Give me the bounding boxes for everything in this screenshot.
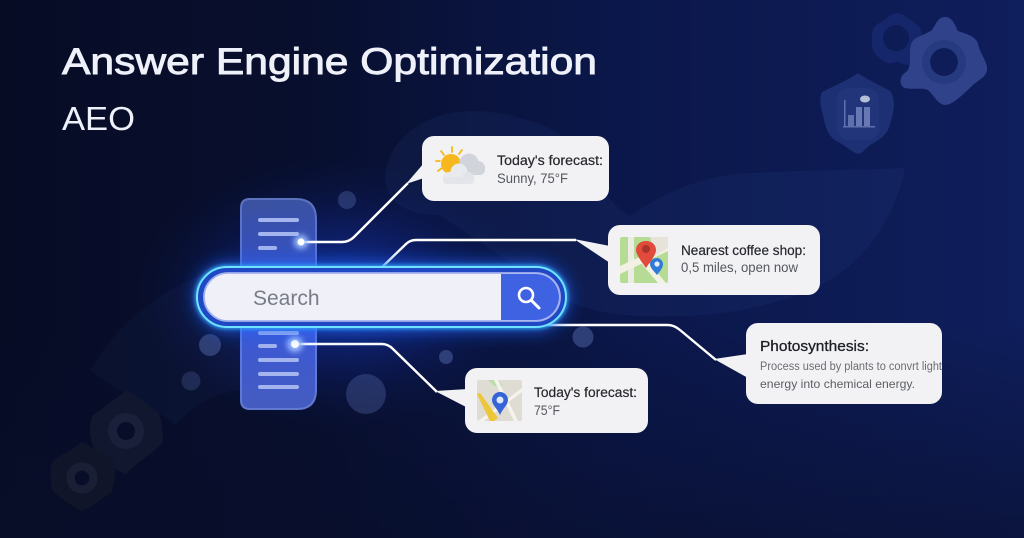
- callout: photosynthesis: energy into chemical energy.: [760, 377, 915, 391]
- subtitle: AEO: [62, 100, 135, 137]
- callout: coffee shop: [608, 225, 820, 295]
- decorative gear: top right small: [872, 13, 922, 65]
- decorative gear: bottom left small: [50, 442, 115, 511]
- callout: map forecast: 75°F: [534, 403, 560, 418]
- search button: [501, 274, 559, 320]
- icon: shield with bar chart: [820, 73, 894, 154]
- icon: magnifier: [519, 288, 539, 308]
- icon: map with pins: [620, 237, 668, 283]
- callout: weather forecast: [422, 136, 609, 201]
- callout text: Today's forecast:: [534, 385, 637, 400]
- callout: map forecast: [465, 368, 648, 433]
- callout: coffee shop: 0,5 miles, open now: [681, 260, 798, 275]
- document text lines: [258, 218, 299, 389]
- search bar: [194, 262, 570, 332]
- callout text: Today's forecast:: [497, 153, 603, 168]
- callout: weather forecast: Sunny, 75°F: [497, 171, 568, 186]
- decorative bubbles: [182, 191, 594, 414]
- connector: forecast callout: [294, 163, 424, 249]
- decorative gear: top right large: [901, 17, 987, 105]
- icon: map with pin: [477, 380, 522, 421]
- callout text: Nearest coffee shop:: [681, 243, 806, 258]
- bar chart bars: [843, 96, 875, 128]
- background wave shapes: [90, 111, 905, 425]
- search input: [204, 273, 560, 321]
- callout: photosynthesis: Process used by plants to convrt light: [760, 361, 943, 373]
- search label: Search: [253, 287, 320, 310]
- callout text: Photosynthesis:: [760, 339, 869, 355]
- icon: blue pin: [650, 258, 663, 275]
- connector: photosynthesis callout: [522, 325, 748, 378]
- callout: photosynthesis: [746, 323, 943, 404]
- connector: coffee shop callout: [378, 239, 610, 271]
- title: Answer Engine Optimization: [62, 41, 597, 82]
- document panel: [240, 198, 317, 410]
- icon: sun and clouds: [436, 147, 485, 184]
- icon: red pin: [636, 241, 656, 268]
- decorative gear: bottom left large: [90, 390, 163, 474]
- connector: map forecast callout: [287, 336, 468, 408]
